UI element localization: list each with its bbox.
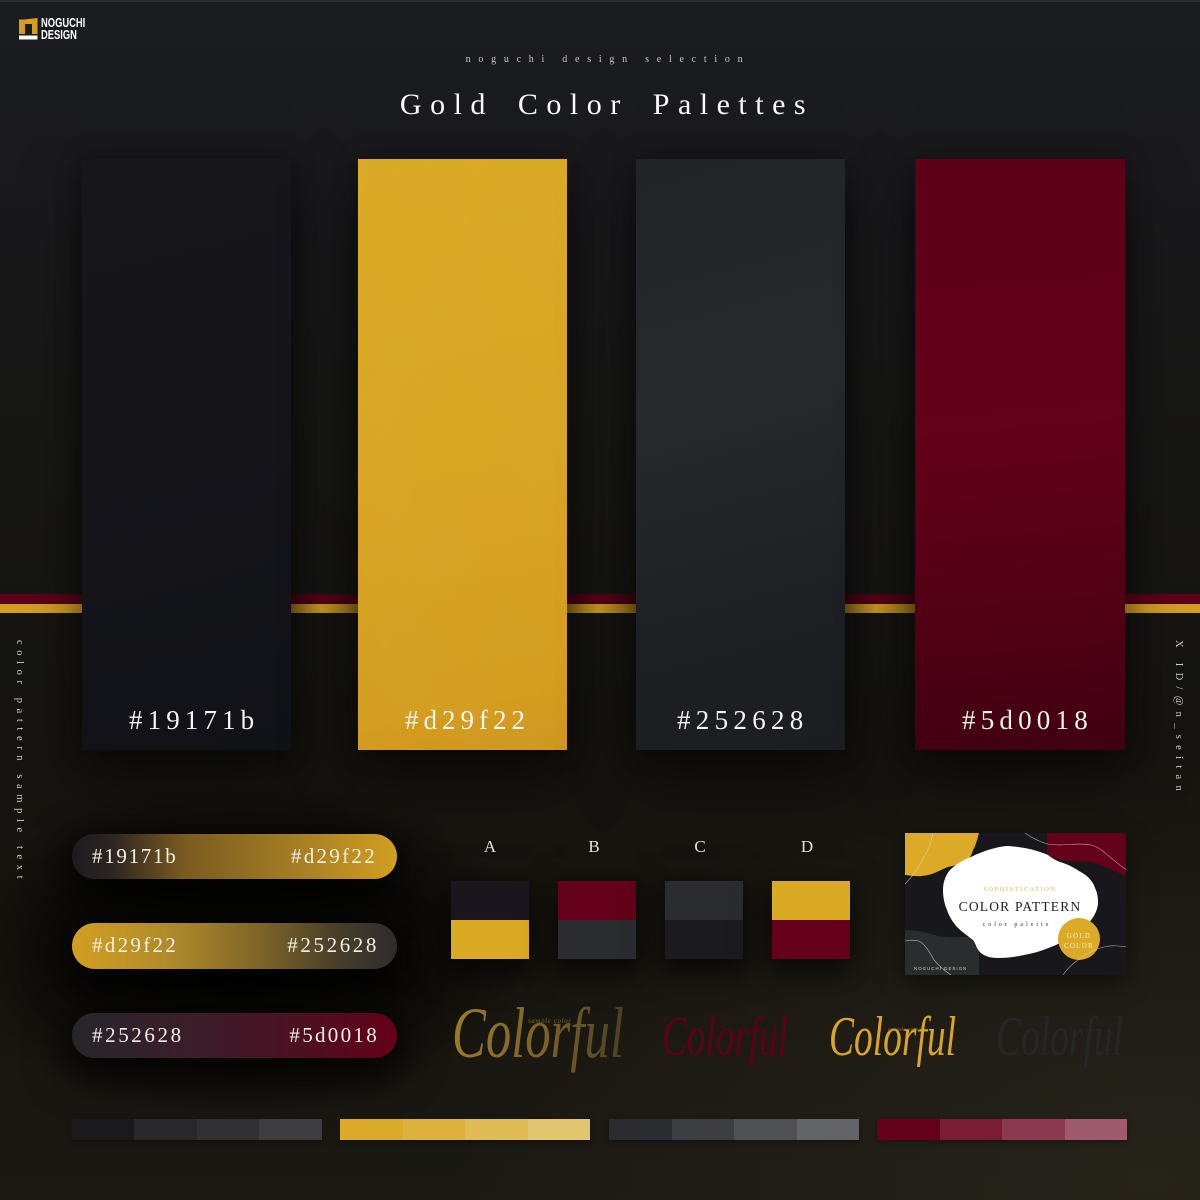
- gradient pill 2: #252628: [287, 933, 379, 957]
- gradient pill 1: [72, 834, 397, 879]
- wordmark: bright gold: [829, 1006, 956, 1068]
- label C: C: [694, 837, 706, 856]
- hex label: d29f22: #d29f22: [405, 705, 530, 735]
- shape: gold corner: [905, 833, 979, 876]
- logo text: [41, 16, 85, 42]
- gold texture: [358, 159, 567, 750]
- shape: gold circle: [1058, 918, 1100, 960]
- gradient pill 2: #d29f22: [92, 933, 178, 957]
- stripes: [0, 594, 1200, 613]
- tint strip: grey: [609, 1119, 859, 1140]
- thin curves: [905, 833, 1127, 975]
- vertical text left: color pattern sample text: [14, 640, 25, 884]
- gradient pill 1: #d29f22: [291, 844, 377, 868]
- wordmark: bright gold: sample color: [888, 1027, 922, 1033]
- tint strip: gold: [340, 1119, 590, 1140]
- label B: B: [588, 837, 600, 856]
- icon: logo mark: [19, 18, 38, 40]
- gradient pill 2: [72, 923, 397, 969]
- card: color pattern: [905, 833, 1126, 975]
- stripe overlap shadow segments: [291, 594, 358, 613]
- wordmark: bright gold: Colorful: [829, 1006, 956, 1068]
- subtitle: noguchi design selection: [466, 54, 750, 65]
- card text: gold color: GOLD: [1067, 932, 1091, 940]
- shape: white blob: [943, 846, 1098, 958]
- card text: color pattern: COLOR PATTERN: [959, 899, 1081, 914]
- wordmark: red: [662, 1006, 788, 1068]
- tint strip: dark: [71, 1119, 322, 1140]
- logo text: DESIGN: [41, 28, 77, 42]
- card text: sophistication: SOPHISTICATION: [983, 886, 1057, 893]
- card: color pattern: COLOR: [1064, 942, 1094, 950]
- label D: D: [801, 837, 813, 856]
- gradient pill 3: [72, 1013, 397, 1058]
- wordmark: red: sample color: [725, 1027, 759, 1033]
- logo: [19, 16, 85, 42]
- shape: grey corner: [905, 930, 979, 975]
- panel: color bar 19171b: [82, 159, 291, 750]
- swatch D: [772, 881, 850, 959]
- hex label: 252628: #252628: [677, 705, 809, 735]
- card text: color palette: color palette: [983, 922, 1051, 928]
- panel: color bar 5d0018: [915, 159, 1125, 750]
- wordmark: dark gold: Colorful: [452, 995, 624, 1073]
- card text: noguchi design: NOGUCHI DESIGN: [914, 966, 967, 971]
- swatch C: [665, 881, 743, 959]
- vertical text right: X ID/@n_seitan: [1173, 640, 1184, 797]
- shape: red corner: [1047, 833, 1127, 877]
- swatch B: [558, 881, 636, 959]
- wordmark: dark gold: [452, 993, 624, 1073]
- wordmark: dark gold: sample color: [528, 1017, 572, 1025]
- tint strip: red: [877, 1119, 1127, 1140]
- wordmark: dark grey: sample color: [1057, 1027, 1091, 1033]
- colorful wordmarks: [452, 995, 1123, 1073]
- title: Gold Color Palettes: [400, 88, 814, 121]
- hex label: 19171b: #19171b: [129, 705, 259, 735]
- gradient pill 1: #19171b: [92, 844, 177, 868]
- logo text: NOGUCHI: [41, 16, 85, 30]
- swatch A: [451, 881, 529, 959]
- top edge highlight: [0, 0, 1200, 2]
- hex label: 5d0018: #5d0018: [962, 705, 1093, 735]
- wordmark: red: Colorful: [662, 1006, 788, 1068]
- panel: color bar d29f22: [358, 159, 567, 750]
- panel: color bar 252628: [636, 159, 845, 750]
- label A: A: [484, 837, 496, 856]
- gradient pill 3: #5d0018: [289, 1023, 379, 1047]
- gradient pill 3: #252628: [92, 1023, 184, 1047]
